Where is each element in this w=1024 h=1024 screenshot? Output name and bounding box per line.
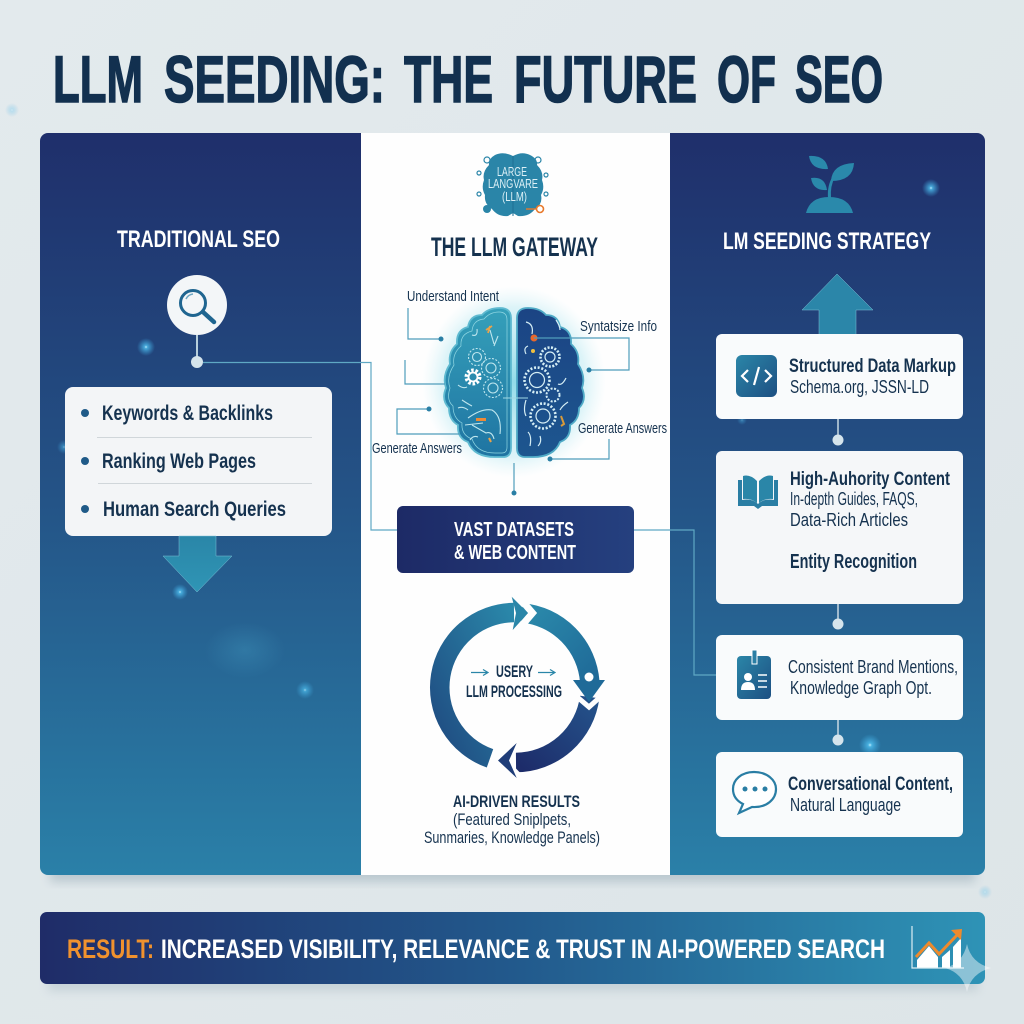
icon: sprout [806, 156, 854, 213]
card: high-authority content: High-Auhority Content [790, 469, 951, 490]
icon: large language brain [477, 153, 548, 216]
cycle label: USERY [496, 662, 533, 681]
connector: datasets to brand card [634, 530, 716, 675]
bullet: ranking [81, 450, 256, 473]
chevron bottom [498, 742, 522, 779]
text: AI-driven results: AI-DRIVEN RESULTS [453, 792, 580, 811]
callout: brain to datasets [512, 463, 516, 496]
bullet: keywords [81, 402, 273, 425]
callout: understand intent [407, 288, 500, 342]
box: vast datasets: & WEB CONTENT [454, 542, 576, 564]
icon: large language brain: (LLM) [502, 189, 527, 204]
brain left hemisphere [444, 308, 511, 457]
connector 2 [832, 604, 844, 630]
card: structured data: Schema.org, JSSN-LD [790, 377, 929, 397]
card: brand mentions: Knowledge Graph Opt. [790, 678, 932, 698]
result bar [40, 912, 991, 992]
glow particles left [57, 338, 314, 699]
bullet: human queries: Human Search Queries [103, 498, 286, 521]
cycle arc left [440, 612, 514, 758]
icon: magnifier [167, 275, 227, 335]
icon: speech bubble [733, 772, 776, 813]
text: AI-driven results: (Featured Sniplpets, [453, 810, 571, 829]
callout: generate answers left: Generate Answers [372, 440, 462, 457]
panel: LLM seeding strategy [670, 133, 985, 875]
card: structured data: Structured Data Markup [789, 356, 956, 377]
title: OF [717, 42, 776, 116]
icon: large language brain: LARGE [497, 164, 527, 179]
card: conversational content: Conversational Content, [788, 774, 953, 795]
card: structured data [716, 334, 963, 419]
icon: large language brain: LANGVARE [488, 176, 538, 191]
heading: the LLM gateway: THE LLM GATEWAY [431, 232, 598, 262]
title: THE [404, 42, 493, 116]
text: AI-driven results: Sunmaries, Knowledge Panels) [424, 828, 600, 847]
arrow: down [163, 536, 232, 592]
callout: generate answers right: Generate Answers [578, 420, 667, 437]
callout: generate answers left [372, 406, 462, 457]
connector 3 [832, 720, 844, 746]
diagram: processing cycle [440, 596, 608, 779]
card: high-authority content: Data-Rich Articles [790, 510, 908, 530]
text: AI-driven results [424, 792, 600, 847]
connector: search to datasets [203, 362, 397, 530]
bullet: keywords: Keywords & Backlinks [102, 402, 273, 425]
cycle label: LLM PROCESSING [466, 682, 562, 701]
gap between top arcs [518, 596, 532, 630]
card: high-authority content: In-depth Guides, FAQS, [790, 489, 918, 509]
cycle label [466, 662, 562, 701]
panel: LLM gateway [361, 133, 670, 875]
connector node [191, 335, 203, 368]
box: vast datasets: VAST DATASETS [454, 519, 574, 541]
connector 1 [832, 419, 844, 446]
callout: synthesize info: Syntatsize Info [580, 318, 657, 335]
title: SEO [795, 42, 883, 116]
callout: generate answers right [548, 420, 667, 462]
arrowhead right [569, 672, 608, 707]
panel: traditional SEO [40, 133, 361, 875]
cycle arc top right [522, 613, 590, 682]
card: traditional list [65, 387, 332, 536]
title: FUTURE [514, 42, 697, 116]
cycle arc bottom right [516, 697, 590, 762]
callout: synthesize info [534, 318, 657, 372]
brain right hemisphere [517, 308, 584, 457]
sparkle [945, 944, 991, 992]
main panel shadow [50, 840, 975, 882]
title [53, 42, 883, 116]
background sparkles [5, 103, 992, 899]
icon: book [738, 476, 778, 509]
icon: code [736, 355, 777, 397]
chevron top [512, 597, 528, 630]
bullet: ranking: Ranking Web Pages [102, 450, 256, 473]
heading: seeding strategy: LM SEEDING STRATEGY [723, 228, 931, 255]
card: brand mentions [716, 635, 963, 720]
card: brand mentions: Consistent Brand Mentions, [788, 657, 958, 677]
result text: RESULT: [67, 934, 154, 964]
card: conversational content [716, 752, 963, 837]
glow particles right [737, 179, 940, 756]
card: high-authority content: Entity Recognition [790, 551, 917, 573]
title: SEEDING: [164, 42, 385, 116]
icon: id badge [737, 650, 771, 699]
heading: traditional SEO: TRADITIONAL SEO [117, 226, 280, 253]
arrow: up [802, 274, 873, 335]
box: vast datasets [397, 506, 634, 573]
icon: growth chart [912, 926, 964, 968]
card: conversational content: Natural Language [790, 795, 901, 815]
title: LLM [53, 42, 143, 116]
card: high-authority content [716, 451, 963, 604]
callout line: left middle [405, 360, 445, 384]
diagram: brain with callouts [372, 286, 667, 496]
callout: understand intent: Understand Intent [407, 288, 500, 305]
